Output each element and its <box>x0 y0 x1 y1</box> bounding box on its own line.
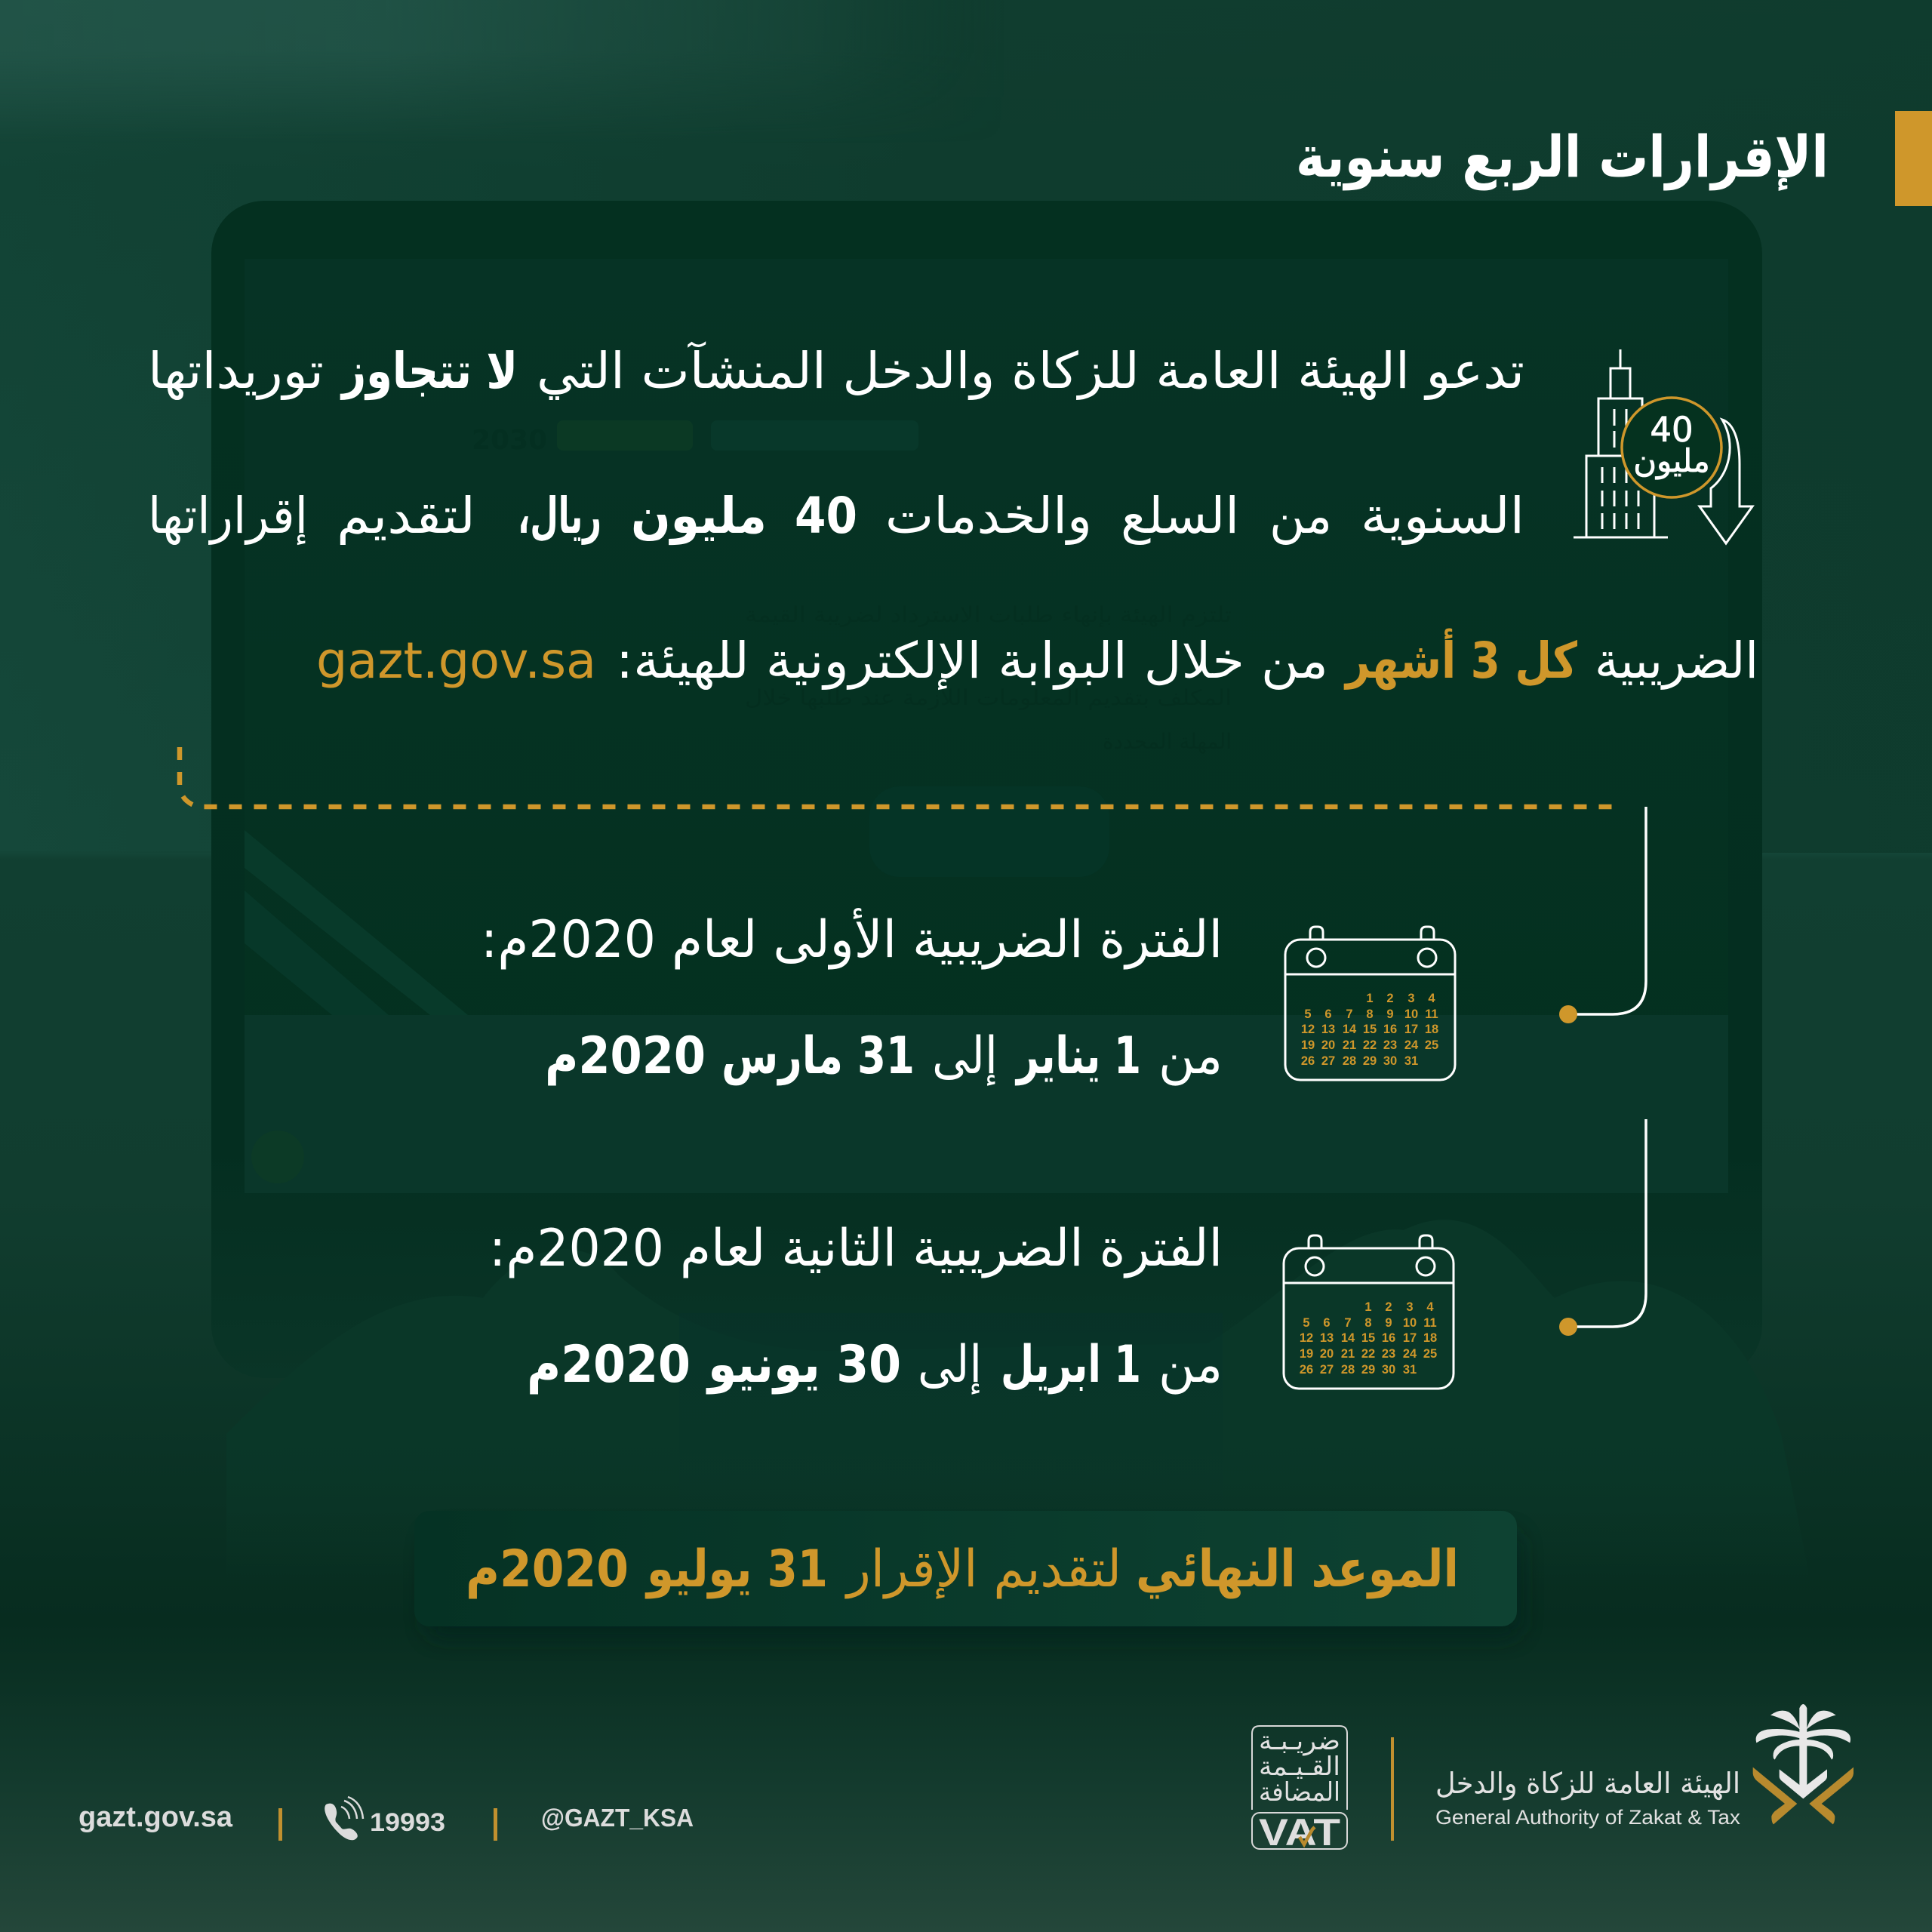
footer divider <box>278 1808 282 1841</box>
icon: calendar one: 13 <box>1321 1023 1335 1036</box>
line 3: من خلال البوابة الإلكترونية للهيئة: <box>616 632 1328 690</box>
icon: calendar two: 8 <box>1364 1316 1372 1330</box>
icon: calendar two: 3 <box>1406 1300 1414 1314</box>
icon: calendar one: 30 <box>1383 1054 1397 1068</box>
icon: calendar one: 5 <box>1304 1008 1312 1021</box>
line 2: من <box>1269 487 1332 545</box>
icon: calendar two: 4 <box>1426 1300 1434 1314</box>
period two dates <box>527 1335 1223 1395</box>
icon: calendar two: 25 <box>1423 1347 1437 1361</box>
title: الإقرارات الربع سنوية <box>1296 123 1829 191</box>
logo: VAT badge: VAT <box>1259 1811 1340 1854</box>
period one heading: الفترة الضريبية الأولى لعام 2020م: <box>481 908 1223 970</box>
panel: final deadline <box>414 1511 1521 1638</box>
logo: VAT badge: المضافة <box>1259 1777 1340 1807</box>
ghost chat bubble <box>251 1131 304 1183</box>
icon: calendar one: 18 <box>1425 1023 1438 1036</box>
intro paragraph <box>148 341 1758 691</box>
icon: building with 40 million badge and down arrow <box>1574 349 1752 543</box>
ghost login button <box>557 420 693 451</box>
icon: building with 40 million badge and down arrow: مليون <box>1633 442 1710 479</box>
icon: calendar two: 2 <box>1385 1300 1392 1314</box>
footer contact: handle: @GAZT_KSA <box>541 1804 694 1832</box>
period one dates: إلى <box>932 1026 998 1086</box>
icon: calendar two: 5 <box>1303 1316 1310 1330</box>
title accent bar <box>1895 111 1932 206</box>
period one dates: من <box>1158 1026 1223 1086</box>
footer divider <box>494 1808 497 1841</box>
line 2 <box>148 487 1524 546</box>
icon: calendar one: 9 <box>1386 1008 1394 1021</box>
line 2: لتقديم <box>337 487 475 545</box>
icon: calendar one: 31 <box>1404 1054 1418 1068</box>
line 3 <box>316 628 1758 691</box>
icon: calendar two: 13 <box>1320 1331 1334 1345</box>
line 2: مليون <box>631 487 767 546</box>
icon: calendar two: 27 <box>1320 1363 1334 1377</box>
icon: phone <box>325 1797 363 1840</box>
icon: calendar one: 14 <box>1343 1023 1357 1036</box>
ghost screen text: المكلف بتقديم المعلومات اللازمة عند طلبها خلال <box>745 685 1232 710</box>
icon: calendar one: 27 <box>1321 1054 1335 1068</box>
icon: calendar two: 24 <box>1403 1347 1417 1361</box>
dashed gold timeline <box>180 747 1614 807</box>
logo divider <box>1391 1737 1394 1841</box>
icon: calendar one: 4 <box>1428 992 1435 1005</box>
line 2: السنوية <box>1361 487 1524 545</box>
line 1: تدعو الهيئة العامة للزكاة والدخل المنشآت التي <box>537 341 1524 400</box>
period one dates: 1 يناير <box>1015 1026 1141 1086</box>
icon: calendar two: 29 <box>1361 1363 1375 1377</box>
screen lower band <box>245 1015 1728 1193</box>
icon: calendar two: 1 <box>1364 1300 1372 1314</box>
icon: calendar two: 16 <box>1382 1331 1395 1345</box>
icon: calendar two: 20 <box>1320 1347 1334 1361</box>
icon: calendar two: 22 <box>1361 1347 1375 1361</box>
period two dates: من <box>1158 1335 1223 1395</box>
icon: calendar one: 16 <box>1383 1023 1397 1036</box>
period two dates: 1 ابريل <box>1001 1335 1141 1395</box>
logo: VAT badge: ضريـبـة <box>1259 1726 1340 1756</box>
line 1: توريداتها <box>148 342 324 400</box>
line 2: إقراراتها <box>148 487 308 546</box>
deadline text <box>466 1540 1459 1599</box>
line 3: كل 3 أشهر <box>1343 628 1578 691</box>
icon: calendar one: 23 <box>1383 1038 1397 1052</box>
line 1: لا تتجاوز <box>340 342 518 401</box>
icon: calendar two: 7 <box>1344 1316 1352 1330</box>
footer contact: website: gazt.gov.sa <box>78 1801 233 1833</box>
period two dates: 2020م <box>527 1335 691 1395</box>
period two dates: إلى <box>918 1335 982 1395</box>
logo: VAT badge: القـيـمة <box>1259 1752 1340 1782</box>
icon: calendar one: 17 <box>1404 1023 1418 1036</box>
organisation name english: General Authority of Zakat & Tax <box>1435 1806 1741 1829</box>
icon: calendar one: 11 <box>1425 1008 1438 1021</box>
icon: calendar one: 12 <box>1301 1023 1315 1036</box>
line 1 <box>148 341 1524 401</box>
line 3: الضريبية <box>1595 632 1758 690</box>
icon: calendar two: 31 <box>1403 1363 1417 1377</box>
icon: calendar one: 15 <box>1363 1023 1377 1036</box>
ghost screen text: المهلة المحددة <box>1103 729 1232 754</box>
logo: palm and swords <box>1753 1704 1854 1824</box>
ghost screen text: 2030 <box>472 425 547 456</box>
icon: building with 40 million badge and down arrow: 40 <box>1650 410 1694 450</box>
icon: calendar one: 7 <box>1346 1008 1353 1021</box>
icon: calendar two: 28 <box>1341 1363 1355 1377</box>
icon: calendar one: 20 <box>1321 1038 1335 1052</box>
icon: calendar two: 21 <box>1341 1347 1355 1361</box>
ghost screen text: تلتزم الهيئة بإنهاء طلبات الاسترداد لضريبة القيمة <box>745 602 1232 627</box>
icon: calendar one: 6 <box>1324 1008 1332 1021</box>
ghost screen button <box>869 786 1109 877</box>
deadline text: 2020م <box>466 1540 629 1599</box>
icon: calendar two: 6 <box>1323 1316 1331 1330</box>
icon: calendar two: 19 <box>1300 1347 1313 1361</box>
icon: calendar one: 24 <box>1404 1038 1419 1052</box>
icon: calendar two: 26 <box>1300 1363 1313 1377</box>
ghost search box <box>711 420 918 451</box>
icon: calendar one: 2 <box>1386 992 1394 1005</box>
icon: calendar one: 21 <box>1343 1038 1356 1052</box>
skyline silhouette <box>226 1220 1811 1585</box>
period one dates: 31 مارس <box>721 1026 915 1086</box>
ghost screen text <box>472 425 1232 754</box>
icon: calendar one: 29 <box>1363 1054 1377 1068</box>
icon: calendar two: 17 <box>1403 1331 1417 1345</box>
device frame <box>211 201 1762 1378</box>
icon: calendar two: 18 <box>1423 1331 1437 1345</box>
period one dates: 2020م <box>545 1026 706 1086</box>
period two heading: الفترة الضريبية الثانية لعام 2020م: <box>489 1219 1223 1278</box>
icon: calendar two: 10 <box>1403 1316 1417 1330</box>
deadline text: الموعد النهائي <box>1136 1540 1459 1599</box>
icon: calendar two: 15 <box>1361 1331 1375 1345</box>
icon: calendar one: 25 <box>1425 1038 1438 1052</box>
icon: calendar one <box>1285 927 1455 1080</box>
icon: calendar two: 30 <box>1382 1363 1395 1377</box>
device screen <box>245 259 1728 1193</box>
icon: calendar one: 28 <box>1343 1054 1356 1068</box>
icon: calendar one: 3 <box>1407 992 1415 1005</box>
icon: calendar one: 8 <box>1366 1008 1374 1021</box>
deadline text: لتقديم الإقرار <box>844 1540 1121 1599</box>
icon: calendar one: 10 <box>1404 1008 1418 1021</box>
connector: period two <box>1559 1119 1646 1336</box>
connector: period one <box>1559 807 1646 1023</box>
icon: calendar one: 19 <box>1301 1038 1315 1052</box>
icon: calendar two: 12 <box>1300 1331 1313 1345</box>
icon: calendar one: 1 <box>1366 992 1374 1005</box>
line 2: 40 <box>795 487 857 545</box>
icon: calendar two <box>1284 1235 1454 1389</box>
deadline text: 31 يوليو <box>645 1540 828 1599</box>
logo: VAT badge <box>1252 1726 1347 1854</box>
organisation name arabic: الهيئة العامة للزكاة والدخل <box>1435 1767 1740 1801</box>
line 2: السلع <box>1121 487 1239 545</box>
icon: calendar one: 26 <box>1301 1054 1315 1068</box>
icon: calendar one: 22 <box>1363 1038 1377 1052</box>
icon: calendar two: 11 <box>1423 1316 1437 1330</box>
line 2: والخدمات <box>885 487 1092 545</box>
icon: calendar two: 23 <box>1382 1347 1395 1361</box>
line 3: gazt.gov.sa <box>316 632 596 690</box>
footer contact: phone number: 19993 <box>370 1808 445 1837</box>
icon: calendar two: 9 <box>1385 1316 1392 1330</box>
period two dates: 30 يونيو <box>706 1335 901 1395</box>
line 2: ريال، <box>518 487 601 545</box>
icon: calendar two: 14 <box>1341 1331 1355 1345</box>
period one dates <box>545 1026 1223 1086</box>
